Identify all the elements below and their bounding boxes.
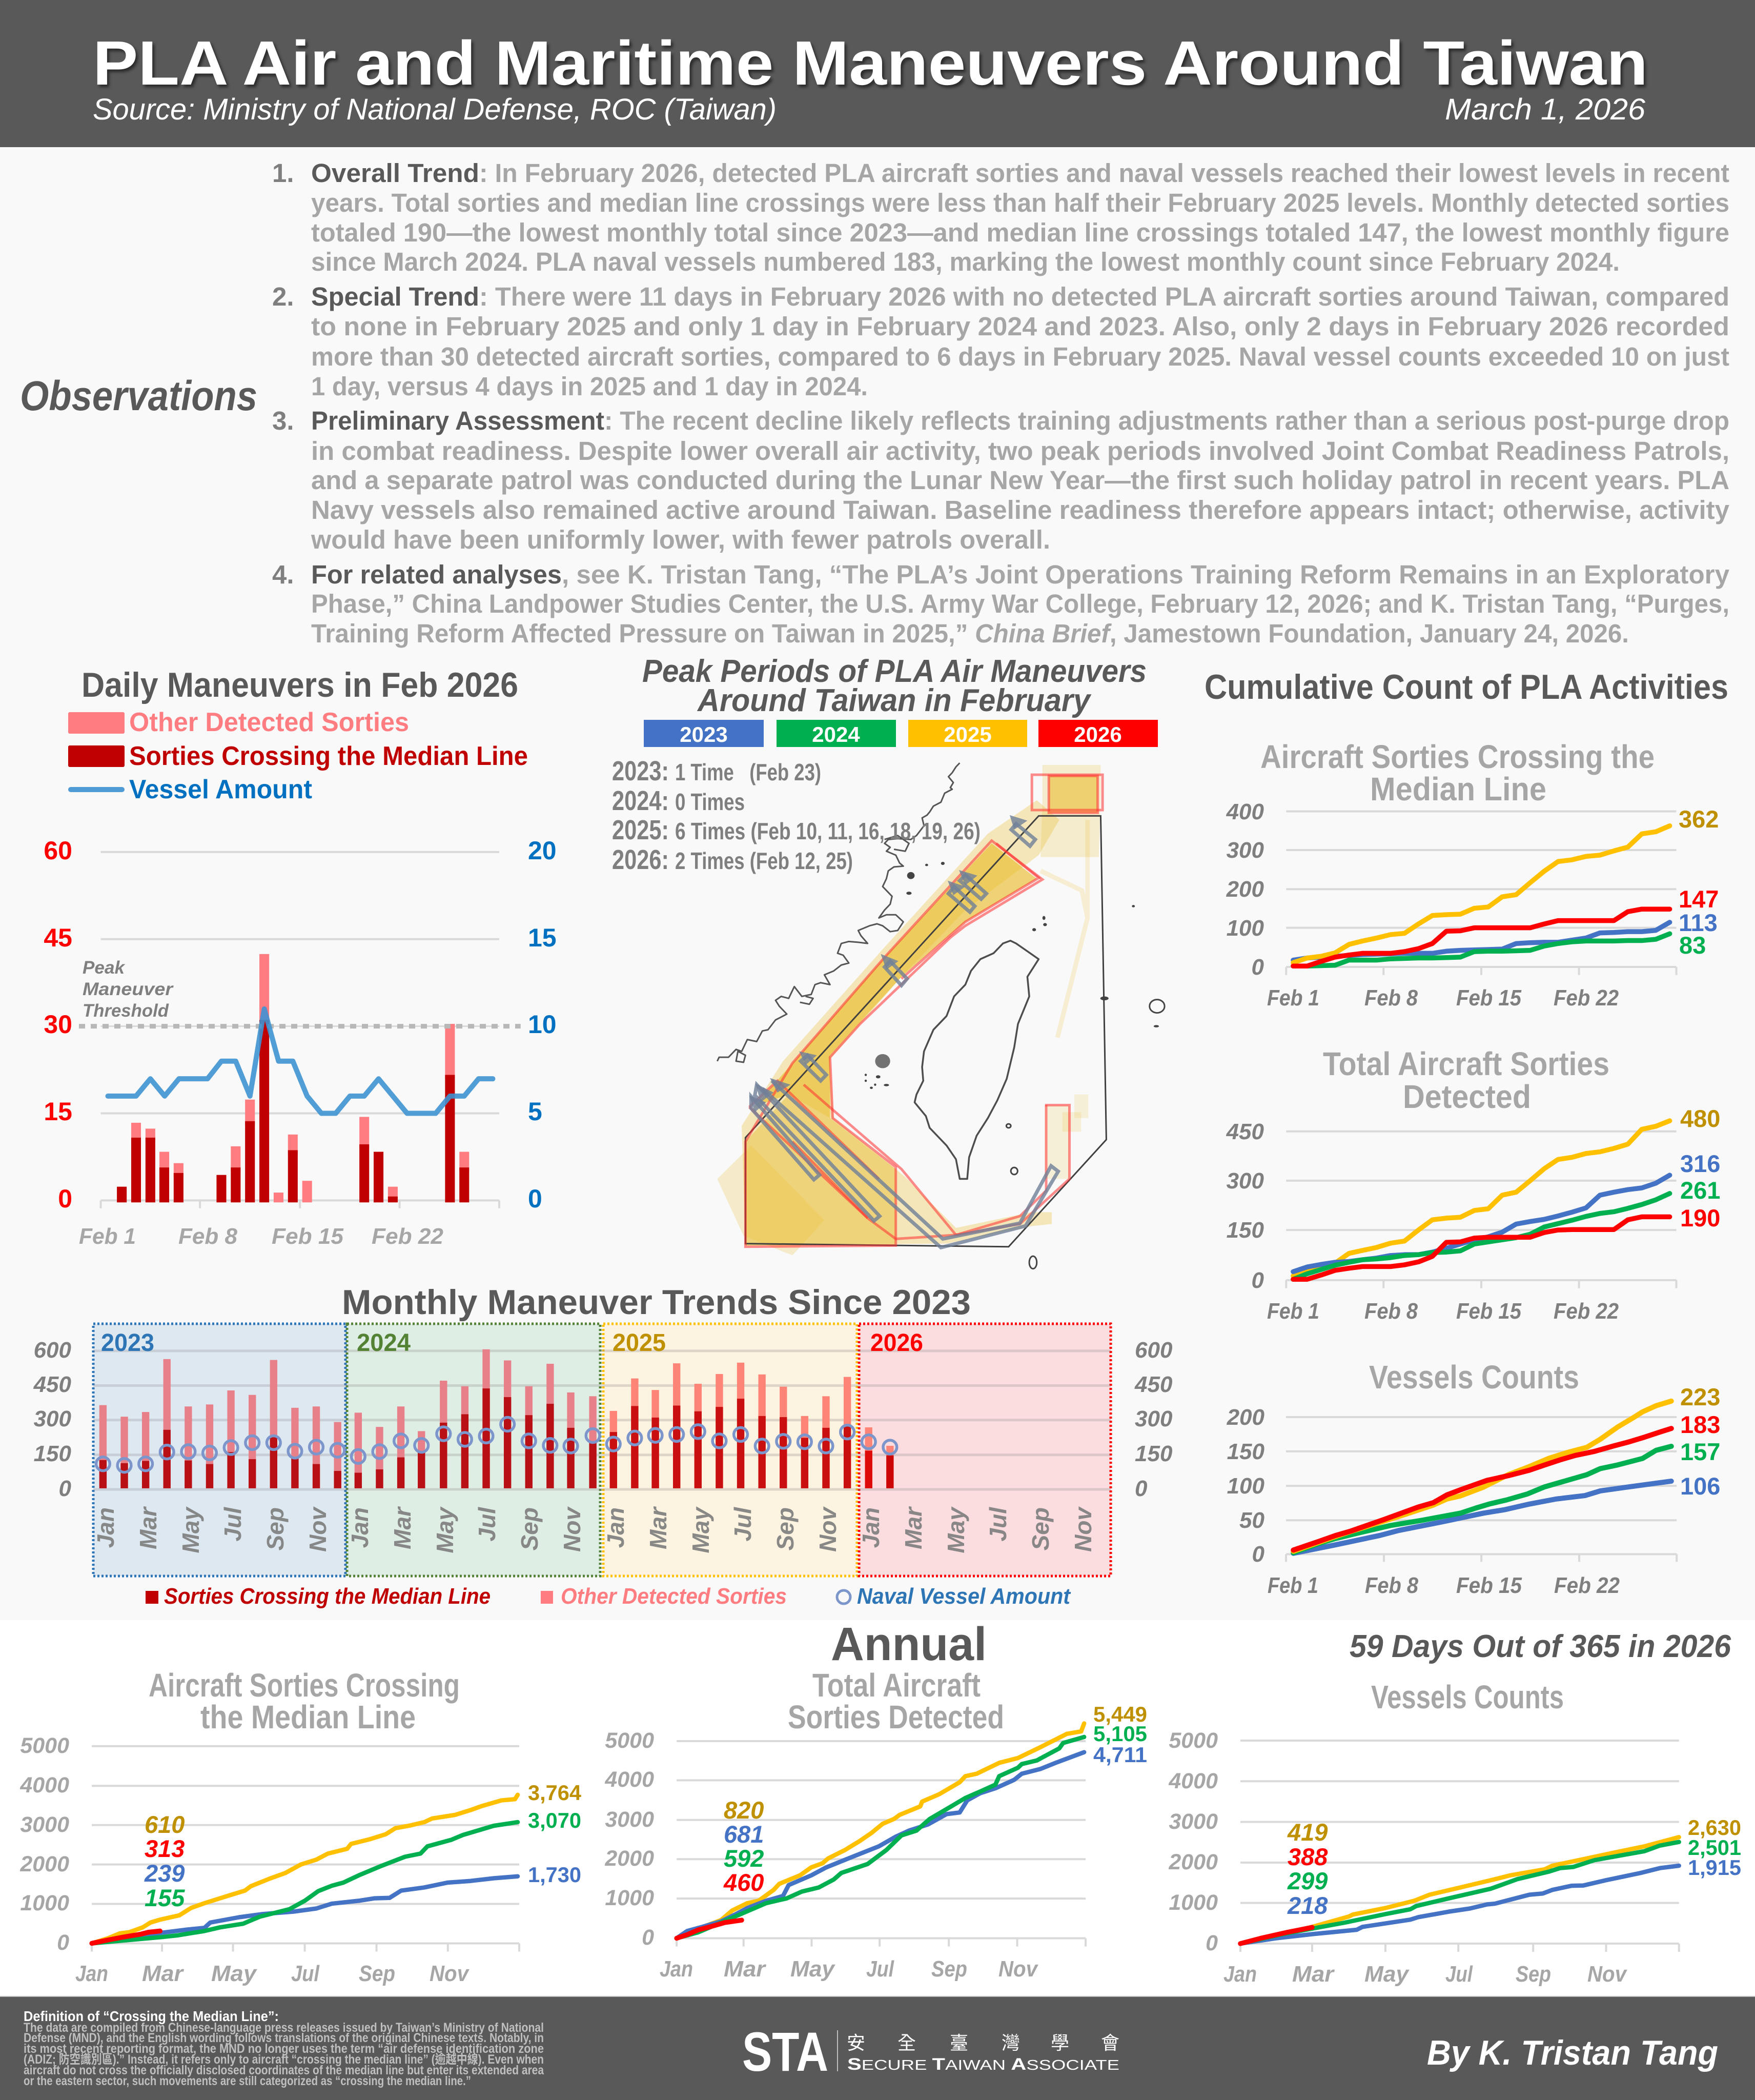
observation 3: preliminary assessment: 3.: [272, 406, 294, 435]
bars: other detected sorties: [131, 954, 469, 1202]
chart: annual sorties crossing median line: Nov: [430, 1961, 470, 1986]
panel: daily maneuvers: [44, 665, 557, 1249]
chart: annual sorties crossing median line: 155: [145, 1884, 185, 1911]
chart: cumulative total sorties: 0: [1252, 1268, 1264, 1293]
chart: annual vessels: Nov: [1587, 1962, 1627, 1987]
chart: annual sorties crossing median line: Jul: [291, 1961, 320, 1986]
observation 1: overall trend: 1.: [272, 158, 294, 188]
chart: annual vessels: Sep: [1516, 1962, 1551, 1987]
daily chart: [44, 836, 557, 1249]
month labels: Mar: [645, 1506, 671, 1549]
monthly legend: Sorties Crossing the Median Line: [164, 1584, 491, 1609]
monthly legend: Other Detected Sorties: [561, 1584, 787, 1609]
chart: annual total sorties: Sorties Detected: [788, 1699, 1004, 1735]
observation 2: special trend: [272, 282, 1729, 401]
grey-blue patrol route arrows: [751, 824, 1058, 1247]
taiwan outline: [914, 941, 1038, 1179]
chart: cumulative total sorties: [1226, 1045, 1720, 1324]
STA logo: STA: [742, 2021, 828, 2083]
year labels: 2025: [613, 1329, 666, 1357]
x axis labels: Feb 15: [272, 1224, 344, 1249]
chart: cumulative total sorties: 480: [1680, 1105, 1720, 1132]
chart: annual sorties crossing median line: 610: [145, 1811, 185, 1838]
year labels: 2026: [870, 1329, 923, 1357]
monthly left axis: 150: [34, 1441, 72, 1466]
chart: cumulative sorties crossing median line: Feb 8: [1364, 985, 1418, 1011]
year labels: 2023: [101, 1329, 154, 1357]
observations heading: Observations: [20, 373, 257, 419]
peak counts by year: 1 Time (Feb 23): [675, 759, 821, 785]
x axis labels: Feb 22: [372, 1224, 444, 1249]
peak threshold dotted line: [79, 1024, 521, 1028]
month labels: Mar: [135, 1506, 161, 1549]
chart: annual vessels: Vessels Counts: [1371, 1679, 1564, 1715]
chart: annual total sorties: 4000: [604, 1767, 654, 1792]
monthly heading: Monthly Maneuver Trends Since 2023: [342, 1283, 971, 1322]
chart: cumulative vessels: Vessels Counts: [1369, 1359, 1579, 1396]
right axis: 15: [528, 923, 557, 952]
observation 3: preliminary assessment: : The recent decline likely reflects training adjustments rather than a serious post-purge drop: [604, 406, 1729, 435]
chart: cumulative total sorties: Feb 22: [1554, 1299, 1619, 1324]
chart: annual vessels: Mar: [1292, 1962, 1335, 1987]
chart: annual vessels: 3000: [1169, 1809, 1218, 1834]
chart: cumulative vessels: 223: [1680, 1383, 1720, 1410]
chart: cumulative vessels: 100: [1227, 1473, 1265, 1499]
chart: cumulative total sorties: Total Aircraft Sorties: [1323, 1045, 1609, 1082]
chart: cumulative vessels: [1227, 1359, 1720, 1598]
monthly left axis: 0: [59, 1476, 72, 1501]
observation 3: preliminary assessment: Navy vessels also remained active around Taiwan. Baseline readiness therefore appears intact; otherwise, activity: [311, 495, 1730, 524]
chart: annual sorties crossing median line: 2000: [19, 1852, 69, 1876]
panel: cumulative count: [1205, 668, 1728, 1598]
peak counts by year: 2024:: [612, 785, 669, 816]
chart: annual sorties crossing median line: Jan: [75, 1961, 108, 1986]
chart: annual sorties crossing median line: [19, 1667, 582, 1986]
chart: cumulative vessels: 106: [1680, 1472, 1720, 1500]
month labels: [92, 1506, 1096, 1553]
observation 1: overall trend: Overall Trend: [311, 158, 479, 188]
chart: cumulative vessels: Feb 22: [1554, 1573, 1620, 1598]
month labels: Sep: [772, 1507, 799, 1550]
chart: cumulative vessels: Feb 8: [1365, 1573, 1418, 1598]
monthly left axis: 600: [34, 1338, 72, 1363]
chart: cumulative sorties crossing median line: 300: [1227, 838, 1264, 863]
month labels: Sep: [1027, 1507, 1054, 1550]
month labels: Jan: [858, 1507, 884, 1548]
chart: cumulative sorties crossing median line: Feb 1: [1267, 985, 1319, 1011]
observation 3: preliminary assessment: [272, 406, 1730, 554]
chart: annual vessels: 299: [1287, 1867, 1328, 1894]
map heading: Peak Periods of PLA Air Maneuvers: [642, 654, 1147, 689]
chart: annual sorties crossing median line: May: [211, 1961, 258, 1986]
chart: cumulative vessels: Feb 15: [1456, 1573, 1522, 1598]
observation 4: related analyses: Phase,” China Landpower Studies Center, the U.S. Army War College, February 12, 2026; and K. Tristan Tang, “Purges,: [311, 589, 1729, 618]
month labels: May: [943, 1506, 969, 1553]
chart: annual sorties crossing median line: 1,730: [528, 1863, 581, 1887]
observation 2: special trend: : There were 11 days in February 2026 with no detected PLA aircraft sorties around Taiwan, compared: [479, 282, 1729, 311]
chart: annual vessels: [1168, 1679, 1741, 1987]
month labels: Jul: [219, 1507, 246, 1541]
definition note: Definition of “Crossing the Median Line”:: [24, 2008, 279, 2024]
chart: annual sorties crossing median line: 3,764: [528, 1781, 582, 1805]
monthly right axis: 0: [1135, 1476, 1148, 1501]
chart: annual total sorties: 5000: [605, 1728, 654, 1753]
observation 4: related analyses: Training Reform Affected Pressure on Taiwan in 2025,” China Brief, Jamestown Foundation, January 24, 2026.: [311, 619, 1629, 648]
left axis: 45: [44, 923, 72, 952]
observation 2: special trend: more than 30 detected aircraft sorties, compared to 6 days in February 2025. Naval vessel counts exceeded 10 on just: [311, 342, 1729, 371]
definition note: (ADIZ; 防空識別區).” Instead, it refers only to aircraft “crossing the median line” (逾越中線). Even when: [24, 2052, 544, 2067]
chart: cumulative total sorties: Feb 1: [1267, 1299, 1319, 1324]
month labels: Jul: [985, 1507, 1011, 1541]
chart: annual vessels: 2,630: [1688, 1815, 1741, 1840]
observation 1: overall trend: totaled 190—the lowest monthly total since 2023—and median line crossings totaled 147, the lowest monthly figure: [311, 218, 1729, 247]
observations panel: [20, 158, 1730, 648]
monthly right axis: [1134, 1338, 1173, 1501]
map heading: Around Taiwan in February: [697, 683, 1092, 718]
footer banner: [0, 1996, 1755, 2100]
threshold label: Maneuver: [83, 979, 174, 999]
chart: annual vessels: Jul: [1445, 1962, 1473, 1987]
days note: 59 Days Out of 365 in 2026: [1350, 1629, 1731, 1664]
chart: annual total sorties: 2000: [604, 1846, 654, 1871]
chart: cumulative total sorties: 300: [1227, 1168, 1264, 1194]
observation 2: special trend: Special Trend: [311, 282, 479, 311]
monthly legend: [146, 1584, 1071, 1609]
peak counts by year: [612, 756, 981, 875]
month labels: Nov: [814, 1506, 841, 1552]
definition note: its most recent reporting format, the MND no longer uses the term “air defense identification zone: [24, 2042, 544, 2056]
chart: cumulative sorties crossing median line: 0: [1252, 955, 1264, 980]
chart: cumulative total sorties: 316: [1680, 1150, 1720, 1177]
year legend: 2023: [680, 722, 728, 746]
eastern islets: [1006, 1000, 1165, 1269]
definition note: [24, 2008, 544, 2088]
month labels: Nov: [559, 1506, 585, 1552]
STA logo: 安全臺灣學會: [847, 2032, 1119, 2053]
month labels: May: [432, 1506, 458, 1553]
monthly right axis: 600: [1135, 1338, 1173, 1363]
median line boundary: [745, 816, 1106, 1247]
header banner: [0, 0, 1755, 147]
chart: cumulative vessels: 0: [1252, 1542, 1265, 1567]
title: PLA Air and Maritime Maneuvers Around Taiwan: [93, 28, 1648, 98]
chart: annual total sorties: 3000: [605, 1807, 654, 1832]
month labels: May: [177, 1506, 204, 1553]
peak counts by year: 2025:: [612, 815, 669, 845]
naval vessel amount markers: [96, 1418, 897, 1472]
sorties crossing the median line bars: [99, 1388, 894, 1488]
peak counts by year: 6 Times (Feb 10, 11, 16, 18, 19, 26): [675, 818, 981, 844]
chart: cumulative sorties crossing median line: [1226, 738, 1719, 1011]
chart: annual total sorties: 1000: [605, 1886, 654, 1910]
observation 2: special trend: to none in February 2025 and only 1 day in February 2024 and 2023. Also, only 2 days in February 2026 recorded: [311, 312, 1729, 341]
month labels: Nov: [1070, 1506, 1096, 1552]
month labels: Jan: [346, 1507, 373, 1548]
observation 4: related analyses: 4.: [272, 560, 294, 589]
activity zones: yellow shading: [717, 765, 1100, 1256]
chart: annual sorties crossing median line: Sep: [359, 1961, 395, 1986]
chart: annual total sorties: Nov: [998, 1956, 1038, 1982]
right axis: 20: [528, 836, 557, 865]
chart: cumulative total sorties: Detected: [1403, 1078, 1531, 1115]
definition note: aircraft do not cross the officially disclosed coordinates of the median line but enter its extended area: [24, 2063, 544, 2077]
year legend: 2024: [812, 722, 860, 746]
chart: annual vessels: 388: [1288, 1843, 1328, 1870]
definition note: The data are compiled from Chinese-language press releases issued by Taiwan’s Ministry of National: [24, 2021, 544, 2035]
observation 4: related analyses: For related analyses: [311, 560, 562, 589]
chart: cumulative vessels: 50: [1239, 1508, 1265, 1533]
monthly right axis: 150: [1135, 1441, 1173, 1466]
chart: annual vessels: 419: [1287, 1819, 1328, 1846]
chart: cumulative sorties crossing median line: Feb 22: [1554, 985, 1619, 1011]
year labels: [101, 1329, 923, 1357]
daily legend: [68, 708, 528, 804]
chart: annual sorties crossing median line: 5000: [20, 1733, 69, 1758]
chart: cumulative total sorties: 190: [1680, 1204, 1720, 1231]
right axis: [528, 836, 557, 1213]
month labels: Sep: [262, 1507, 289, 1550]
peak counts by year: 2023:: [612, 756, 669, 786]
right axis: 0: [528, 1184, 542, 1213]
month labels: May: [687, 1506, 714, 1553]
left axis: 15: [44, 1097, 72, 1126]
chart: annual sorties crossing median line: 4000: [19, 1773, 69, 1798]
chart: cumulative total sorties: Feb 15: [1456, 1299, 1521, 1324]
chart: annual total sorties: May: [790, 1956, 836, 1982]
chart: annual sorties crossing median line: 313: [145, 1835, 185, 1862]
china coastline: [717, 763, 960, 1062]
source line: Source: Ministry of National Defense, ROC (Taiwan): [93, 93, 777, 126]
observation 3: preliminary assessment: Preliminary Assessment: [311, 406, 604, 435]
chart: annual vessels: May: [1364, 1962, 1410, 1987]
chart: annual total sorties: 4,711: [1093, 1743, 1147, 1767]
panel: peak periods map: [612, 654, 1165, 1269]
chart: cumulative sorties crossing median line: 362: [1679, 805, 1719, 833]
chart: annual total sorties: 0: [642, 1925, 654, 1950]
year legend: 2026: [1074, 722, 1122, 746]
chart: annual total sorties: Mar: [724, 1956, 767, 1982]
chart: annual total sorties: 820: [724, 1796, 764, 1824]
monthly right axis: 300: [1135, 1406, 1173, 1431]
daily legend: Other Detected Sorties: [129, 708, 409, 737]
month labels: Jan: [602, 1507, 629, 1548]
chart: cumulative vessels: Feb 1: [1268, 1573, 1318, 1598]
chart: annual total sorties: Total Aircraft: [812, 1667, 981, 1704]
STA logo: [742, 2021, 1119, 2083]
chart: cumulative sorties crossing median line: 400: [1226, 799, 1264, 824]
annual heading: Annual: [831, 1618, 987, 1670]
chart: cumulative vessels: 157: [1680, 1438, 1720, 1465]
monthly left axis: [33, 1338, 72, 1501]
x axis labels: Feb 1: [79, 1224, 136, 1249]
month labels: Sep: [516, 1507, 543, 1550]
threshold label: Peak: [83, 958, 126, 978]
chart: annual vessels: 0: [1206, 1931, 1218, 1955]
chart: annual total sorties: Jul: [866, 1956, 894, 1982]
definition note: or the eastern sector, such movements are still categorized as “crossing the median line.”: [24, 2074, 471, 2088]
peak counts by year: 2 Times (Feb 12, 25): [675, 847, 853, 874]
chart: annual total sorties: [604, 1667, 1147, 1982]
vessel line: [108, 1009, 493, 1114]
chart: cumulative sorties crossing median line: 113: [1679, 909, 1718, 936]
date: March 1, 2026: [1445, 93, 1646, 126]
chart: annual vessels: 218: [1287, 1892, 1328, 1919]
chart: annual sorties crossing median line: 3,070: [528, 1808, 581, 1832]
chart: annual sorties crossing median line: 239: [144, 1860, 185, 1887]
chart: cumulative vessels: 183: [1680, 1411, 1720, 1438]
chart: cumulative vessels: 200: [1227, 1405, 1265, 1430]
chart: cumulative vessels: 150: [1227, 1439, 1265, 1464]
month labels: Jul: [474, 1507, 500, 1541]
chart: annual vessels: 4000: [1168, 1769, 1218, 1793]
chart: cumulative sorties crossing median line: Aircraft Sorties Crossing the: [1260, 738, 1655, 775]
observation 1: overall trend: since March 2024. PLA naval vessels numbered 183, marking the lowest monthly count since February 2024.: [311, 247, 1620, 276]
chart: annual total sorties: 5,105: [1093, 1722, 1147, 1746]
chart: annual vessels: 5000: [1169, 1728, 1218, 1753]
chart: annual vessels: 2,501: [1688, 1835, 1741, 1860]
observation 3: preliminary assessment: and a separate patrol was conducted during the Lunar New Year—the first such holiday patrol in recent years. PLA: [311, 466, 1729, 495]
month labels: Mar: [389, 1506, 416, 1549]
observation 1: overall trend: years. Total sorties and median line crossings were less than half their February 2025 levels. Monthly detected sorties: [311, 188, 1729, 217]
monthly left axis: 300: [34, 1406, 72, 1431]
x axis labels: Feb 8: [178, 1224, 238, 1249]
chart: annual sorties crossing median line: 1000: [20, 1891, 69, 1915]
year legend: [644, 720, 1158, 747]
chart: annual sorties crossing median line: 0: [57, 1930, 69, 1955]
chart: annual vessels: 2000: [1168, 1850, 1218, 1874]
daily heading: Daily Maneuvers in Feb 2026: [81, 665, 518, 704]
observation 2: special trend: 1 day, versus 4 days in 2025 and 1 day in 2024.: [311, 372, 868, 401]
monthly right axis: 450: [1134, 1372, 1173, 1397]
chart: annual vessels: 1000: [1169, 1890, 1218, 1915]
month labels: Nov: [304, 1506, 331, 1552]
right axis: 10: [528, 1010, 557, 1039]
chart: cumulative total sorties: 150: [1227, 1218, 1264, 1243]
chart: cumulative total sorties: Feb 8: [1364, 1299, 1418, 1324]
chart: annual total sorties: 681: [724, 1821, 764, 1848]
matsu and kinmen islands: [865, 862, 1159, 1089]
year labels: 2024: [357, 1329, 411, 1357]
observation 1: overall trend: : In February 2026, detected PLA aircraft sorties and naval vessels reached their lowest levels in recent: [479, 158, 1729, 188]
STA logo: SECURE TAIWAN ASSOCIATE: [847, 2055, 1119, 2073]
threshold label: [83, 958, 174, 1021]
left axis: [44, 836, 72, 1213]
red patrol zones: [745, 775, 1103, 1247]
chart: cumulative total sorties: 450: [1226, 1119, 1264, 1144]
left axis: 30: [44, 1010, 72, 1039]
x axis labels: [79, 1224, 444, 1249]
chart: annual total sorties: 5,449: [1093, 1702, 1147, 1726]
monthly left axis: 450: [33, 1372, 72, 1397]
year panels: [93, 1324, 1111, 1576]
other detected sorties bars: [99, 1349, 894, 1488]
chart: annual sorties crossing median line: 3000: [20, 1812, 69, 1837]
observation 3: preliminary assessment: in combat readiness. Despite lower overall air activity, two peak periods involved Joint Combat Readiness Patrols,: [311, 436, 1729, 466]
observation 3: preliminary assessment: would have been uniformly lower, with fewer patrols overall.: [311, 525, 1050, 554]
chart: cumulative sorties crossing median line: 147: [1679, 885, 1719, 913]
chart: cumulative sorties crossing median line: Feb 15: [1456, 985, 1521, 1011]
month labels: Jul: [729, 1507, 756, 1541]
left axis: 0: [58, 1184, 72, 1213]
peak counts by year: 2026:: [612, 844, 669, 875]
chart: cumulative total sorties: 261: [1680, 1177, 1720, 1204]
peak counts by year: 0 Times: [675, 789, 745, 815]
author credit: By K. Tristan Tang: [1427, 2033, 1718, 2072]
chart: annual sorties crossing median line: Mar: [142, 1961, 185, 1986]
chart: annual total sorties: 592: [724, 1845, 764, 1872]
chart: annual total sorties: Jan: [660, 1956, 693, 1982]
monthly legend: Naval Vessel Amount: [857, 1584, 1071, 1609]
chart: cumulative sorties crossing median line: 100: [1227, 916, 1264, 941]
year legend: 2025: [944, 722, 992, 746]
left axis: 60: [44, 836, 72, 865]
chart: annual sorties crossing median line: Aircraft Sorties Crossing: [149, 1667, 460, 1704]
chart: annual total sorties: Sep: [931, 1956, 967, 1982]
chart: cumulative sorties crossing median line: 83: [1679, 932, 1706, 959]
threshold label: Threshold: [83, 1001, 169, 1021]
chart: cumulative sorties crossing median line: 200: [1226, 877, 1264, 902]
observation 2: special trend: 2.: [272, 282, 294, 311]
observation 4: related analyses: [272, 560, 1730, 648]
chart: annual total sorties: 460: [723, 1869, 764, 1896]
panel: monthly maneuver trends: [33, 1283, 1173, 1609]
chart: annual vessels: 1,915: [1688, 1855, 1741, 1880]
month labels: Mar: [900, 1506, 927, 1549]
daily legend: Sorties Crossing the Median Line: [129, 741, 528, 771]
observation 1: overall trend: [272, 158, 1729, 276]
panel: annual: [19, 1618, 1741, 1987]
monthly gridlines and bars: [93, 1349, 1111, 1489]
map: [717, 763, 1165, 1269]
month labels: Jan: [92, 1507, 119, 1548]
daily legend: Vessel Amount: [129, 775, 312, 804]
observation 4: related analyses: , see K. Tristan Tang, “The PLA’s Joint Operations Training Reform Remains in an Exploratory: [562, 560, 1730, 589]
chart: annual sorties crossing median line: the Median Line: [200, 1699, 416, 1735]
definition note: Defense (MND), and the English wording follows translations of the original Chinese texts. Notably, in: [24, 2031, 544, 2045]
chart: annual vessels: Jan: [1223, 1962, 1257, 1987]
map heading: [642, 654, 1147, 718]
bars: sorties crossing the median line: [117, 1020, 469, 1202]
right axis: 5: [528, 1097, 542, 1126]
chart: cumulative sorties crossing median line: Median Line: [1370, 771, 1546, 807]
